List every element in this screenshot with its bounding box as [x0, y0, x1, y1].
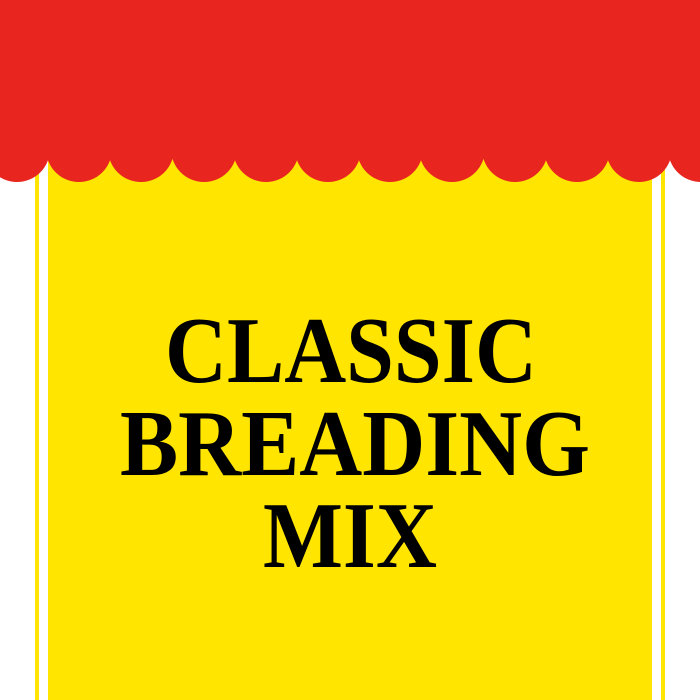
yellow panel — [48, 150, 652, 700]
left thin stripe — [35, 150, 39, 700]
right thin stripe — [661, 150, 665, 700]
title: MIX — [263, 484, 437, 588]
title — [120, 299, 590, 588]
red awning with scallops — [0, 0, 700, 182]
title: CLASSIC — [165, 299, 537, 403]
title: BREADING — [120, 392, 590, 496]
